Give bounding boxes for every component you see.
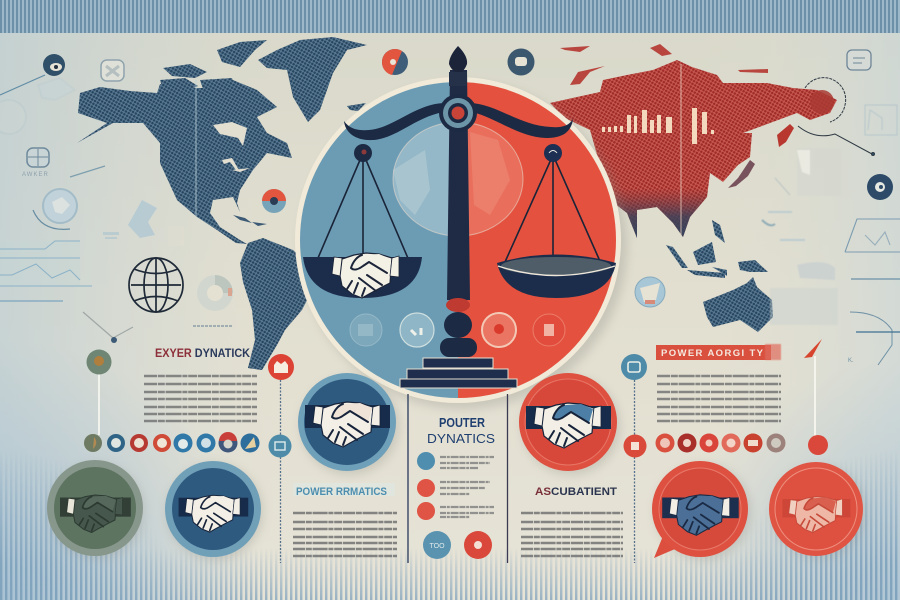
badge: red top left	[268, 354, 294, 380]
Caribbean	[233, 215, 267, 226]
Islands	[666, 220, 768, 276]
heading: pouter dynamics: POUTER	[439, 415, 486, 430]
badge red	[464, 531, 492, 559]
heading banner: right: POWER AORGI TY	[661, 348, 764, 359]
circle: navy handshake	[165, 461, 263, 560]
badges on the map	[262, 48, 900, 365]
knob stack	[440, 298, 477, 357]
heading banner: right	[656, 344, 781, 360]
badge: blue top right	[621, 354, 647, 380]
scale beam	[344, 103, 573, 140]
sketch curve right: K.	[848, 358, 854, 364]
circle: top navy handshake	[298, 373, 399, 475]
icon: red junction right	[624, 434, 646, 458]
map tail over heading	[248, 345, 272, 370]
icon: faded blob	[103, 200, 184, 246]
heading: power dynamics center left: POWER RRMATICS	[296, 486, 387, 498]
bullets	[417, 452, 435, 470]
icon: faded world badge	[33, 166, 105, 229]
left pan with handshake	[303, 253, 422, 298]
icon: eye	[0, 54, 65, 95]
right chains	[505, 155, 603, 268]
bullet text	[440, 457, 494, 517]
chart: faded line chart	[0, 241, 92, 301]
icon row: left	[84, 432, 260, 452]
panel: center column	[417, 415, 495, 559]
icon: rounded square	[22, 148, 49, 178]
icon: globe	[129, 258, 183, 312]
left hanger	[354, 144, 372, 162]
icon: badge red blue	[262, 189, 286, 213]
icon: rounded square: AWKER	[22, 172, 49, 178]
icon: badge navy	[508, 48, 534, 76]
pivot	[439, 94, 477, 132]
finial	[449, 46, 467, 73]
scale post	[447, 70, 470, 300]
icon: blue junction left	[268, 434, 292, 458]
heading: left: EXYER DYNATICK	[155, 346, 250, 360]
faded small discs	[350, 313, 565, 347]
sketch chart right	[845, 219, 900, 279]
disc halves	[300, 82, 616, 398]
left chains	[318, 153, 413, 270]
faded icons left side	[0, 54, 233, 343]
top stripe band	[0, 0, 900, 33]
heading: assurement: ASCUBATIENT	[535, 486, 617, 498]
bottom stripe band	[0, 464, 898, 600]
icon row: right	[656, 434, 786, 452]
map: Hudson Bay and lakes	[213, 122, 250, 172]
faded panels at right	[762, 105, 897, 325]
central scale disc	[290, 46, 628, 410]
pin: olive	[86, 350, 112, 435]
globe inside disc	[393, 122, 523, 236]
circle: olive handshake	[47, 460, 145, 559]
badge blue: TOO	[429, 543, 445, 550]
Kamchatka	[777, 124, 794, 147]
Australia	[703, 277, 773, 332]
text block: right	[657, 376, 781, 421]
icon: pointer nodes	[83, 312, 133, 343]
badge blue	[423, 531, 451, 559]
North America	[77, 80, 292, 244]
steps	[400, 358, 517, 388]
vertical map lines	[196, 64, 681, 235]
Arctic fragments	[560, 44, 768, 85]
small globe badge	[635, 277, 665, 307]
disc rim	[295, 77, 621, 403]
icon: badge red	[382, 49, 408, 75]
right hanger	[544, 144, 562, 162]
icon: faded square	[101, 60, 124, 81]
text block: left	[144, 376, 257, 421]
panel dividers	[280, 380, 634, 563]
Japan	[728, 160, 755, 188]
pin: red right	[804, 339, 828, 455]
circle: red handshake with tail	[652, 461, 751, 560]
icon: outline square top right	[847, 50, 871, 70]
map: Southeast Asia and Australia	[666, 220, 773, 332]
Greenland	[258, 37, 367, 122]
right pan	[497, 254, 616, 298]
disc shadow	[301, 83, 627, 409]
caption under pie	[193, 325, 233, 327]
map: Americas	[77, 37, 367, 370]
Kamchatka tip	[810, 90, 834, 114]
Arctic islands	[160, 40, 267, 96]
icon: pie	[197, 275, 233, 311]
circle: pale red handshake	[769, 462, 866, 559]
map: Eurasia	[550, 44, 837, 238]
circle: top red handshake	[519, 373, 620, 475]
icon: orbit at Kamchatka	[798, 78, 874, 156]
text block: center right	[521, 513, 623, 556]
text block: center left	[293, 513, 397, 556]
icon: badge navy right	[867, 174, 893, 200]
sketch curve right	[848, 312, 900, 365]
South America	[240, 238, 320, 370]
panel: center column: DYNATICS	[427, 431, 495, 446]
icon: pale blobs	[0, 78, 75, 134]
bar chart on the Asia map	[602, 108, 714, 144]
